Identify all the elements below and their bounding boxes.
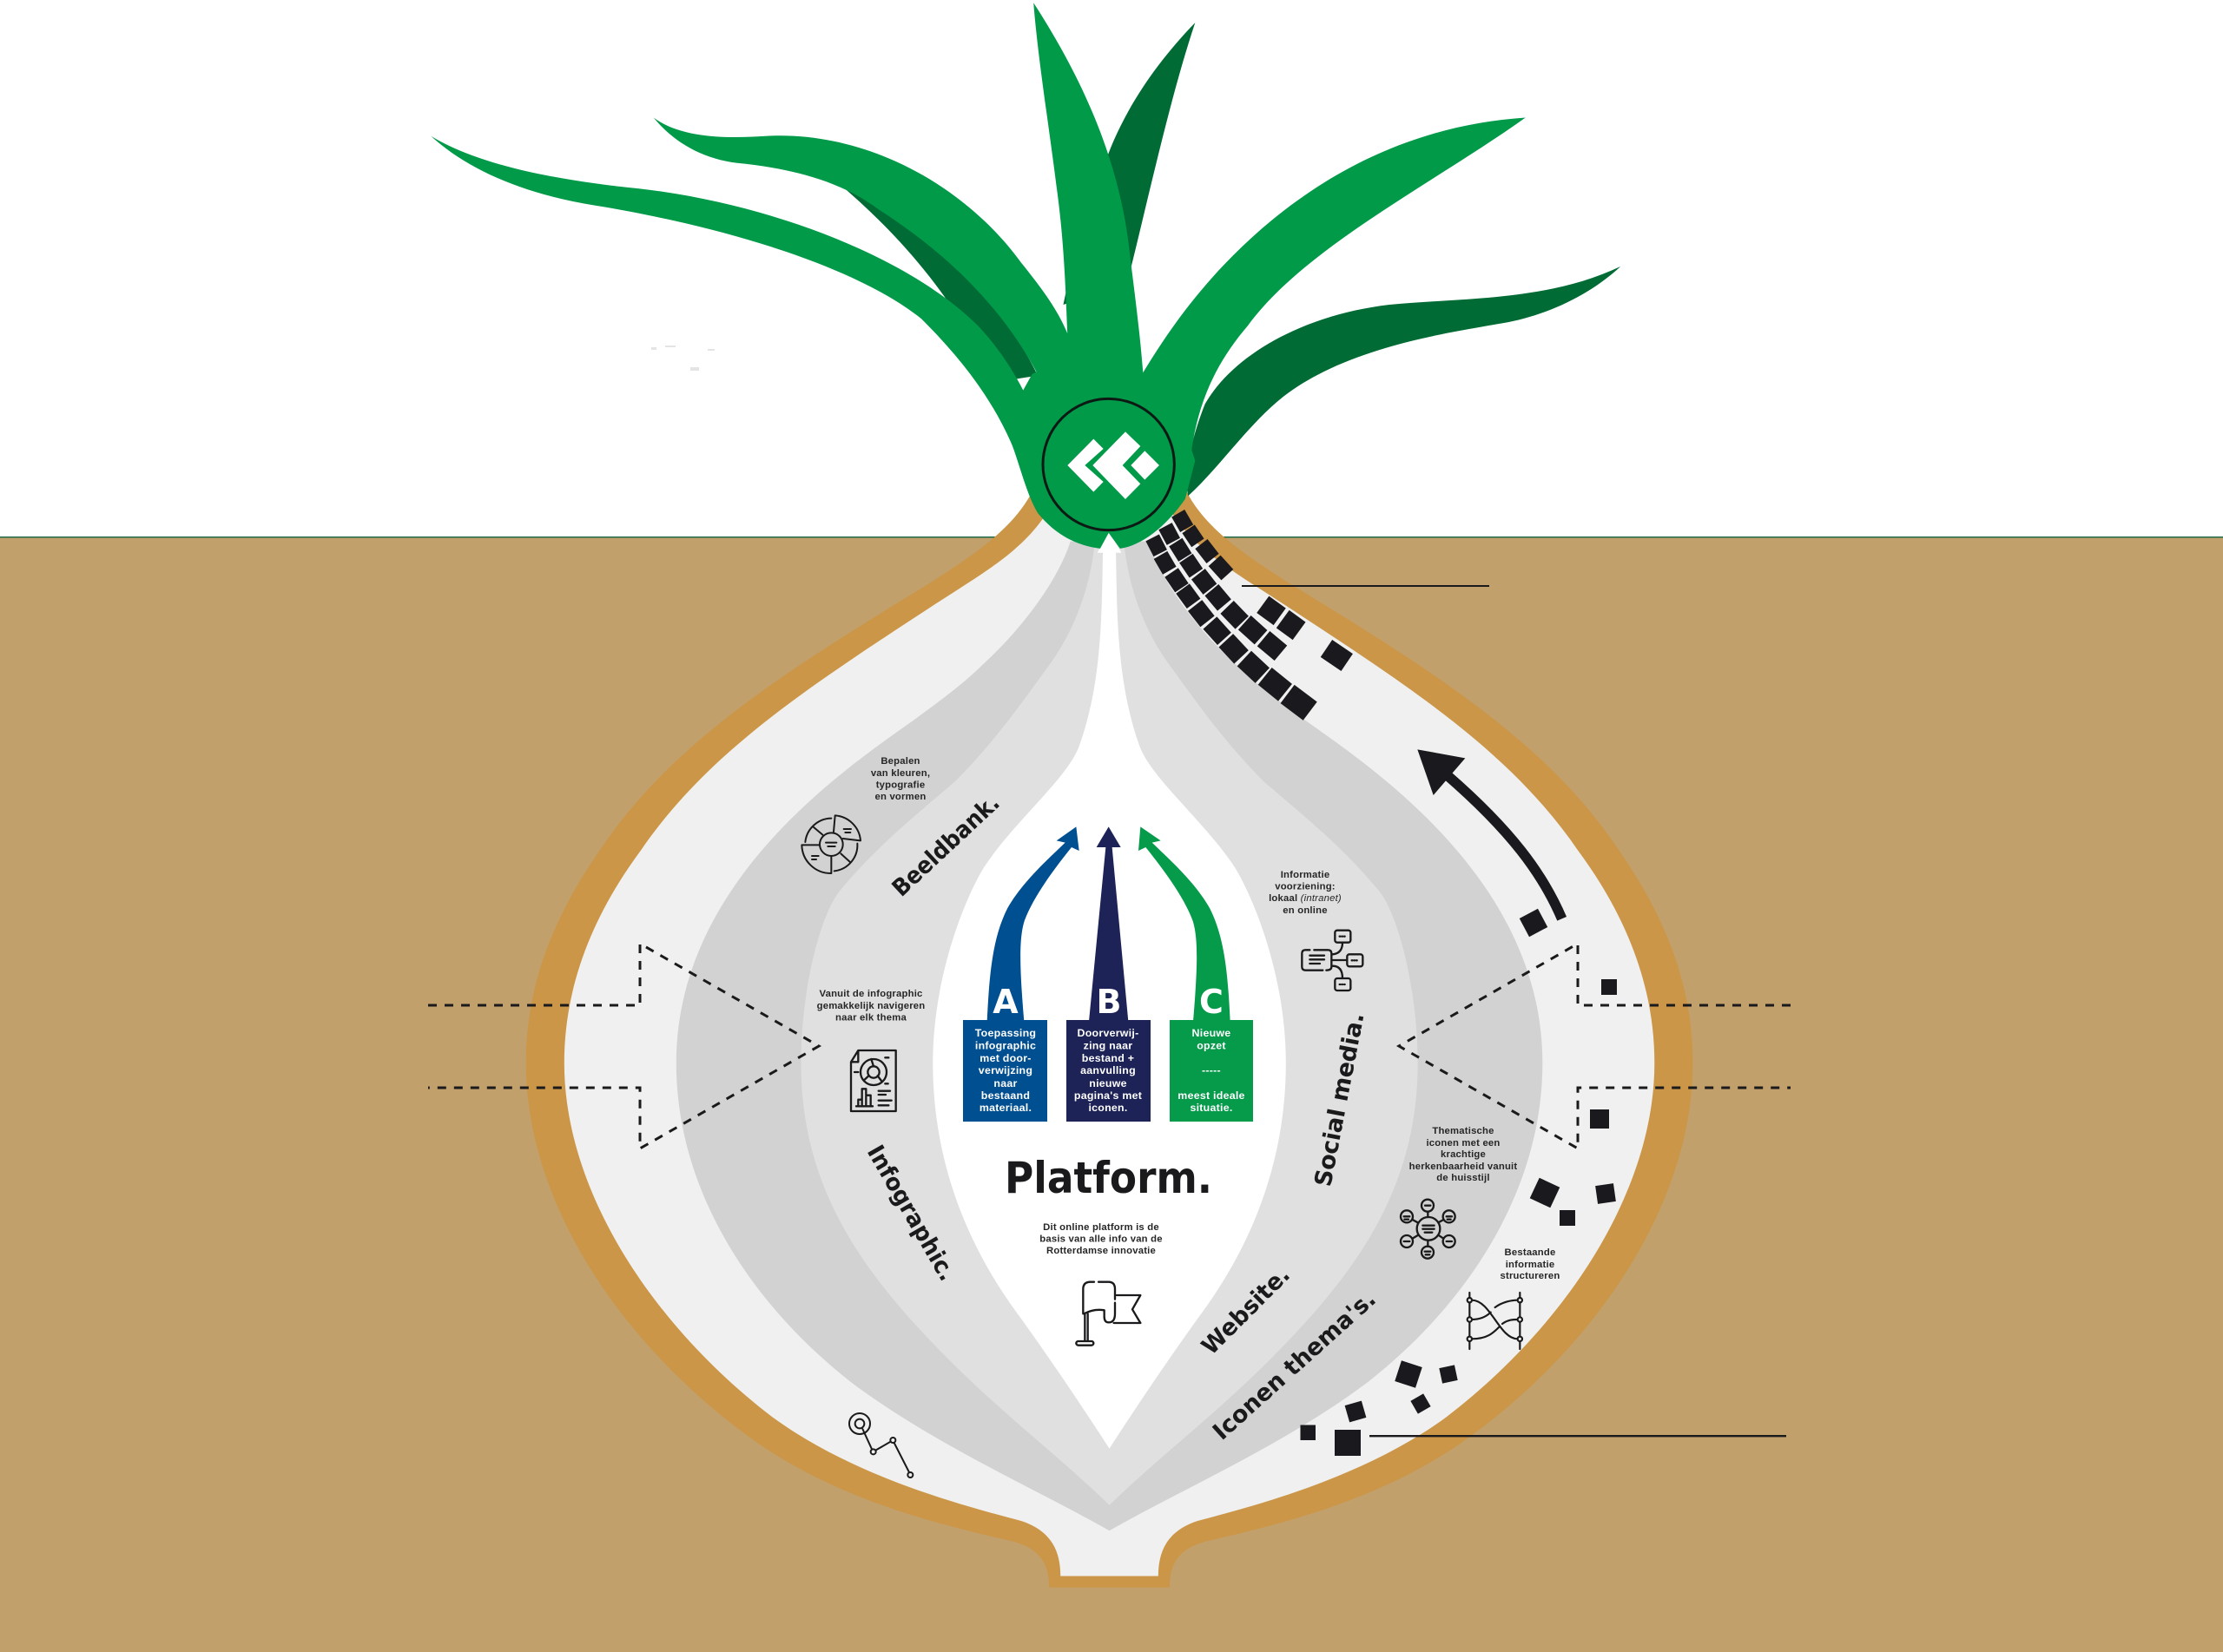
long left leaf [431,136,1056,489]
text: Bestaande description: structureren [1501,1271,1560,1281]
dark leaf shadow [836,181,1038,383]
text C: opzet [1197,1039,1226,1051]
dark right leaf [1187,267,1620,496]
onion leaves [431,3,1620,549]
label: Social media: Social media. [1309,1010,1370,1188]
text: Infographic description: Vanuit de infographic [819,989,923,999]
text: Bestaande description: informatie [1506,1260,1554,1270]
onion bulb [526,492,1692,1588]
letter C: C [1199,983,1224,1021]
callout line top [1242,585,1489,587]
box B [1066,1020,1151,1122]
icon: route path [849,1413,913,1478]
label: Infographic: Infographic. [861,1141,960,1286]
option A [963,826,1079,1122]
text: Infographic description: gemakkelijk navigeren [817,1001,925,1011]
text A: met door- [980,1052,1032,1064]
text: Beeldbank description: en vormen [875,792,926,802]
dashed arrow left [428,944,819,1149]
arrow B [1089,826,1128,1022]
layer: third ring [801,546,1418,1505]
text C: situatie. [1190,1102,1233,1114]
text B: Doorverwij- [1078,1027,1138,1039]
text B: aanvulling [1080,1064,1136,1076]
text A: naar [993,1077,1018,1089]
pixel grid squares top right [1145,510,1353,721]
letter A: A [993,983,1019,1021]
text: Iconen description: Thematische [1432,1126,1494,1136]
text B: pagina's met [1074,1089,1142,1102]
badge ring [1043,398,1174,530]
heading: Platform: Platform. [1005,1153,1212,1203]
horizon line [0,536,2223,538]
arrow A [987,826,1079,1022]
icon: flag [1076,1282,1140,1346]
logo badge [1043,398,1174,530]
text B: zing naar [1084,1039,1132,1051]
text: platform description: Rotterdamse innovatie [1046,1246,1156,1256]
box A [963,1020,1047,1122]
arrow shaft [1446,774,1562,918]
label: Iconen themas: Iconen thema's. [1208,1286,1382,1445]
text: Beeldbank description: typografie [876,780,925,790]
arrow C [1138,826,1230,1022]
text: Bestaande description: Bestaande [1505,1247,1555,1258]
text: platform description: basis van alle info van de [1039,1234,1163,1245]
text A: bestaand [981,1089,1030,1102]
outer skin [526,492,1692,1588]
logo mark [1067,431,1159,499]
text: Social media description: Informatie [1281,870,1329,880]
white arrow tip at top of core [1098,531,1121,567]
text: platform description: Dit online platform is de [1043,1222,1159,1233]
text: Social media description: lokaal (intranet) [1269,893,1342,904]
text: Infographic description: naar elk thema [835,1012,907,1023]
dashed arrow right [1399,944,1791,1149]
option C [1138,826,1253,1122]
layer: second ring [676,542,1542,1530]
tall centre leaf [1033,3,1145,411]
scattered squares [1301,909,1617,1456]
icon: weave structure [1468,1293,1522,1349]
upper left leaf [654,118,1078,383]
text A: materiaal. [980,1102,1032,1114]
arrows and boxes A B C [963,826,1253,1122]
right leaf [1134,118,1526,489]
text C: Nieuwe [1192,1027,1230,1039]
text: Iconen description: herkenbaarheid vanuit [1409,1162,1517,1172]
text B: iconen. [1088,1102,1128,1114]
icon: network circles [1401,1200,1455,1259]
text C: meest ideale [1177,1089,1245,1102]
text B: bestand + [1082,1052,1134,1064]
text A: infographic [975,1039,1036,1051]
faint smudge in sky [651,346,715,371]
text C: ----- [1202,1064,1221,1076]
box C [1170,1020,1253,1122]
arrow head [1417,749,1465,795]
label: Beeldbank: Beeldbank. [887,789,1006,902]
letter B: B [1097,983,1121,1021]
text: Social media description: voorziening: [1275,882,1336,892]
text A: Toepassing [975,1027,1036,1039]
text: Beeldbank description: van kleuren, [871,768,930,779]
layer: white core [933,546,1286,1449]
text: Iconen description: de huisstijl [1436,1173,1490,1183]
text: Iconen description: krachtige [1441,1149,1486,1160]
text A: verwijzing [979,1064,1032,1076]
text: Social media description: en online [1283,905,1328,916]
text: Beeldbank description: Bepalen [881,756,920,767]
icon: colour wheel [801,815,861,873]
neck blob [1004,354,1195,549]
icon: report document [851,1050,896,1111]
dark back leaf [1063,23,1195,305]
label: Website: Website. [1197,1261,1296,1360]
layer: outer flesh [564,496,1654,1576]
callout line bottom [1369,1435,1786,1437]
option B [1066,826,1151,1122]
icon: hub diagram [1302,931,1362,991]
text: Iconen description: iconen met een [1426,1138,1501,1149]
large black arrow [1417,749,1562,918]
soil ground [0,537,2223,1652]
text B: nieuwe [1089,1077,1127,1089]
